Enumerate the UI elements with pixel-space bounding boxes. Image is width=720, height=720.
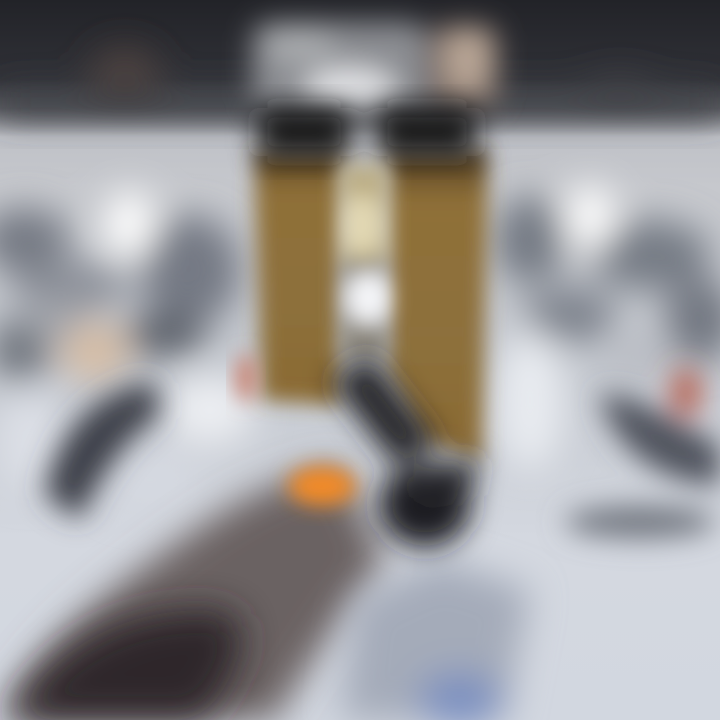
bottle bodies: amber columns [254,150,488,460]
crowd blur: right side [494,186,720,470]
figure blur: lower left dark shape [45,382,160,520]
sleeve: blue-grey lower centre [340,560,530,720]
dark clasp: black bottle base [330,355,480,547]
background: dark horizon blotches [0,47,720,115]
hand: dark diagonal shape [0,465,385,720]
figure blur: lower right dark shape [565,368,720,538]
hand: shadowed lower part [10,610,242,720]
crowd blur: left side [0,191,255,510]
bottle pair [252,22,498,460]
red accent near bottle [236,354,256,402]
bottle necks: black bands [258,108,476,156]
bottle caps: silver tops [252,22,498,112]
gap between bottles: highlights [340,165,390,360]
orange glow [288,466,356,506]
